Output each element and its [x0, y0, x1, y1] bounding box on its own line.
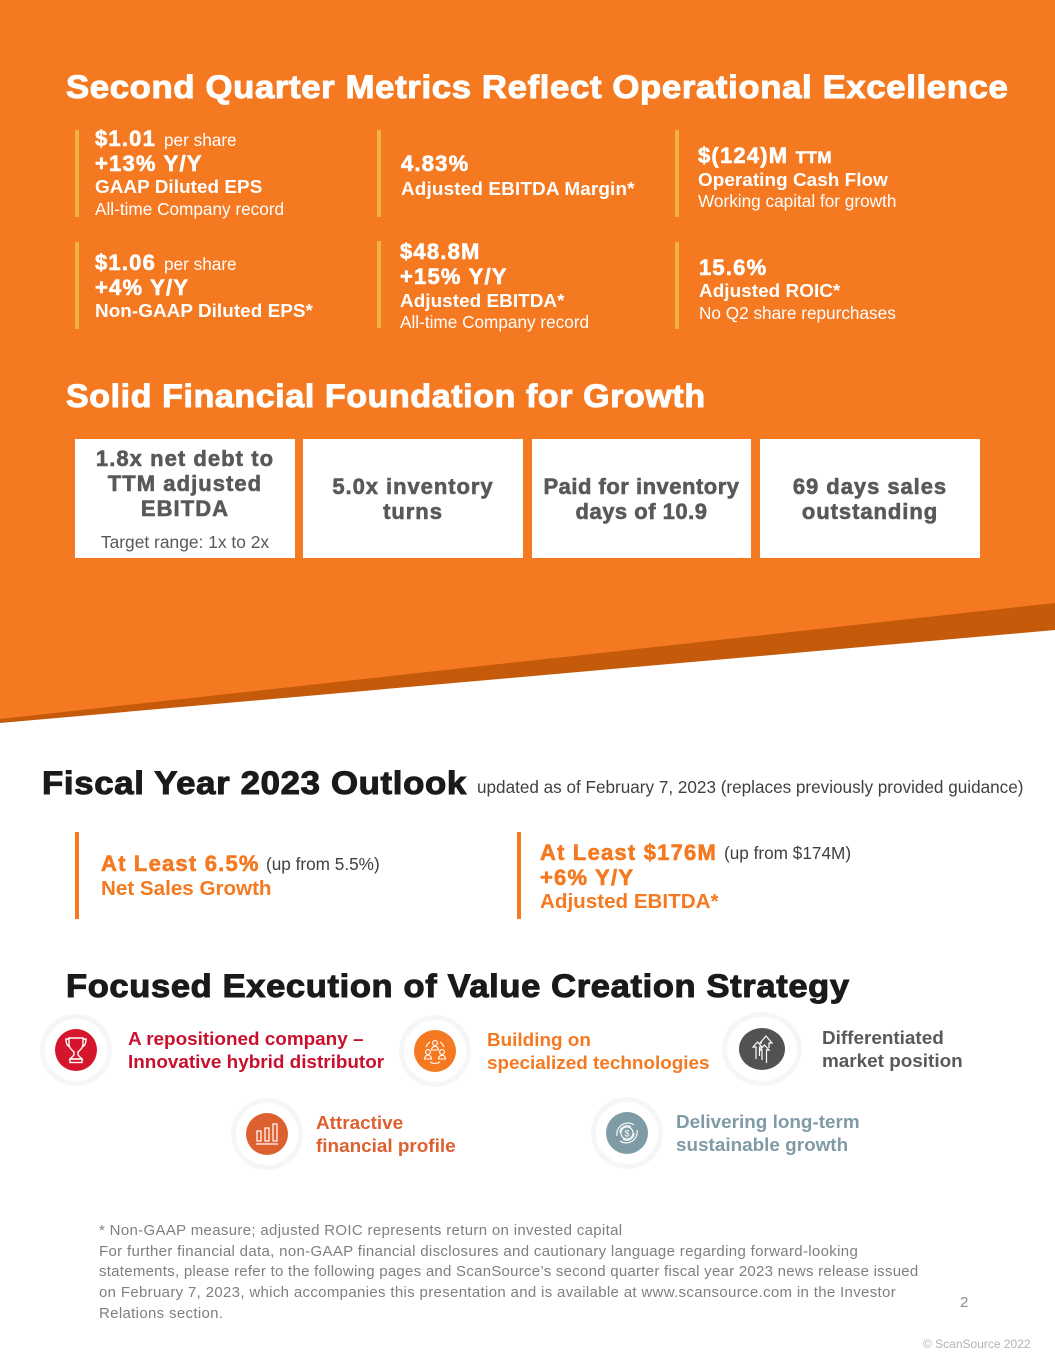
icon: people group — [399, 1015, 471, 1087]
strategy item: specialized technologies: specialized technologies — [487, 1053, 710, 1074]
metric: adjusted ROIC: Adjusted ROIC* — [699, 281, 840, 302]
metric: adjusted EBITDA — [377, 239, 589, 332]
card: net debt — [75, 439, 295, 558]
metric: adjusted EBITDA: $48.8M — [400, 239, 481, 264]
icon: dollar cycle: $ — [624, 1128, 630, 1138]
metric: adjusted ROIC: 15.6% — [699, 255, 767, 280]
footnote: Relations section. — [99, 1305, 223, 1322]
heading: focused execution: Focused Execution of Value Creation Strategy — [66, 968, 850, 1004]
metric: operating cash flow — [675, 130, 896, 217]
footnote: statements, please refer to the following pages and ScanSource’s second quarter fiscal year 2023 news release issued — [99, 1263, 919, 1280]
card: net debt: 1.8x net debt to — [96, 446, 274, 471]
strategy item: financial profile: Attractive — [316, 1113, 403, 1134]
outlook: net sales growth: Net Sales Growth — [101, 877, 272, 900]
metric: non-GAAP diluted EPS: Non-GAAP Diluted EPS* — [95, 301, 313, 322]
metric: adjusted EBITDA margin — [377, 130, 635, 217]
metric: non-GAAP diluted EPS — [75, 242, 313, 329]
heading: second quarter metrics: Second Quarter Metrics Reflect Operational Excellence — [66, 69, 1008, 105]
strategy item: long-term sustainable growth: Delivering long-term — [676, 1112, 860, 1133]
strategy item: repositioned company — [40, 1014, 384, 1086]
metric: GAAP diluted EPS: $1.01 — [95, 126, 156, 151]
card: paid for inventory: Paid for inventory — [543, 474, 740, 499]
heading: solid financial foundation: Solid Financial Foundation for Growth — [66, 378, 706, 414]
metric: GAAP diluted EPS: GAAP Diluted EPS — [95, 177, 262, 198]
outlook: adjusted EBITDA: At Least $176M — [540, 840, 717, 865]
metric: GAAP diluted EPS — [75, 126, 284, 219]
icon: dollar cycle — [591, 1097, 663, 1169]
strategy item: differentiated market position: Differentiated — [822, 1028, 944, 1049]
footnote — [99, 1222, 919, 1322]
orange header background — [0, 0, 1055, 723]
outlook: net sales growth: At Least 6.5% — [101, 851, 260, 876]
strategy item: repositioned company: Innovative hybrid distributor — [128, 1052, 384, 1073]
strategy item: differentiated market position: market position — [822, 1051, 963, 1072]
outlook: net sales growth — [75, 832, 380, 919]
heading: fiscal year 2023 outlook: Fiscal Year 2023 Outlook — [42, 765, 467, 801]
metric: operating cash flow: Working capital for growth — [698, 191, 896, 211]
metric: non-GAAP diluted EPS: +4% Y/Y — [95, 275, 189, 300]
strategy item: financial profile — [231, 1098, 456, 1170]
card: net debt: EBITDA — [141, 496, 229, 521]
outlook: net sales growth: (up from 5.5%) — [266, 854, 380, 874]
metric: adjusted EBITDA: Adjusted EBITDA* — [400, 291, 565, 312]
card: inventory turns — [303, 439, 523, 558]
card: days sales outstanding: 69 days sales — [793, 474, 947, 499]
metric: adjusted EBITDA: +15% Y/Y — [400, 264, 508, 289]
card: paid for inventory: days of 10.9 — [576, 499, 707, 524]
copyright: © ScanSource 2022 — [923, 1337, 1031, 1351]
heading: fiscal year 2023 outlook: updated as of February 7, 2023 (replaces previously provided guidance) — [477, 777, 1023, 797]
metric: adjusted EBITDA margin: Adjusted EBITDA Margin* — [401, 179, 635, 200]
outlook: adjusted EBITDA: (up from $174M) — [724, 843, 851, 863]
heading: fiscal year 2023 outlook — [42, 765, 1023, 801]
metric: GAAP diluted EPS: +13% Y/Y — [95, 151, 203, 176]
strategy item: long-term sustainable growth — [591, 1097, 860, 1169]
icon: bar chart — [231, 1098, 303, 1170]
card: net debt: TTM adjusted — [108, 471, 262, 496]
footnote: on February 7, 2023, which accompanies this presentation and is available at www.scansource.com in the Investor — [99, 1284, 896, 1301]
strategy item: repositioned company: A repositioned company – — [128, 1029, 363, 1050]
page number: 2 — [960, 1294, 968, 1311]
metric: GAAP diluted EPS: per share — [164, 130, 237, 150]
outlook: adjusted EBITDA: Adjusted EBITDA* — [540, 890, 718, 913]
strategy item: specialized technologies — [399, 1015, 710, 1087]
metric: adjusted EBITDA margin: 4.83% — [401, 151, 469, 176]
outlook: adjusted EBITDA: +6% Y/Y — [540, 865, 634, 890]
outlook: adjusted EBITDA — [517, 832, 851, 919]
card: days sales outstanding: outstanding — [802, 499, 938, 524]
card: inventory turns: turns — [383, 499, 443, 524]
strategy item: differentiated market position — [722, 1012, 963, 1086]
metric: adjusted ROIC — [675, 242, 896, 329]
metric: adjusted EBITDA: All-time Company record — [400, 312, 589, 332]
card: days sales outstanding — [760, 439, 980, 558]
metric: non-GAAP diluted EPS: $1.06 — [95, 250, 156, 275]
footnote: * Non-GAAP measure; adjusted ROIC represents return on invested capital — [99, 1222, 622, 1239]
strategy item: financial profile: financial profile — [316, 1136, 456, 1157]
icon: rising arrows — [722, 1012, 802, 1086]
metric: GAAP diluted EPS: All-time Company record — [95, 199, 284, 219]
strategy item: specialized technologies: Building on — [487, 1030, 591, 1051]
metric: operating cash flow: Operating Cash Flow — [698, 170, 888, 191]
icon: trophy — [40, 1014, 112, 1086]
metric: non-GAAP diluted EPS: per share — [164, 254, 237, 274]
metric: adjusted ROIC: No Q2 share repurchases — [699, 303, 896, 323]
card: net debt: Target range: 1x to 2x — [101, 532, 269, 552]
card: inventory turns: 5.0x inventory — [332, 474, 494, 499]
strategy item: long-term sustainable growth: sustainable growth — [676, 1135, 848, 1156]
footnote: For further financial data, non-GAAP financial disclosures and cautionary language regarding forward-looking — [99, 1243, 858, 1260]
card: paid for inventory — [532, 439, 751, 558]
metric: operating cash flow: $(124)M TTM — [698, 143, 832, 168]
